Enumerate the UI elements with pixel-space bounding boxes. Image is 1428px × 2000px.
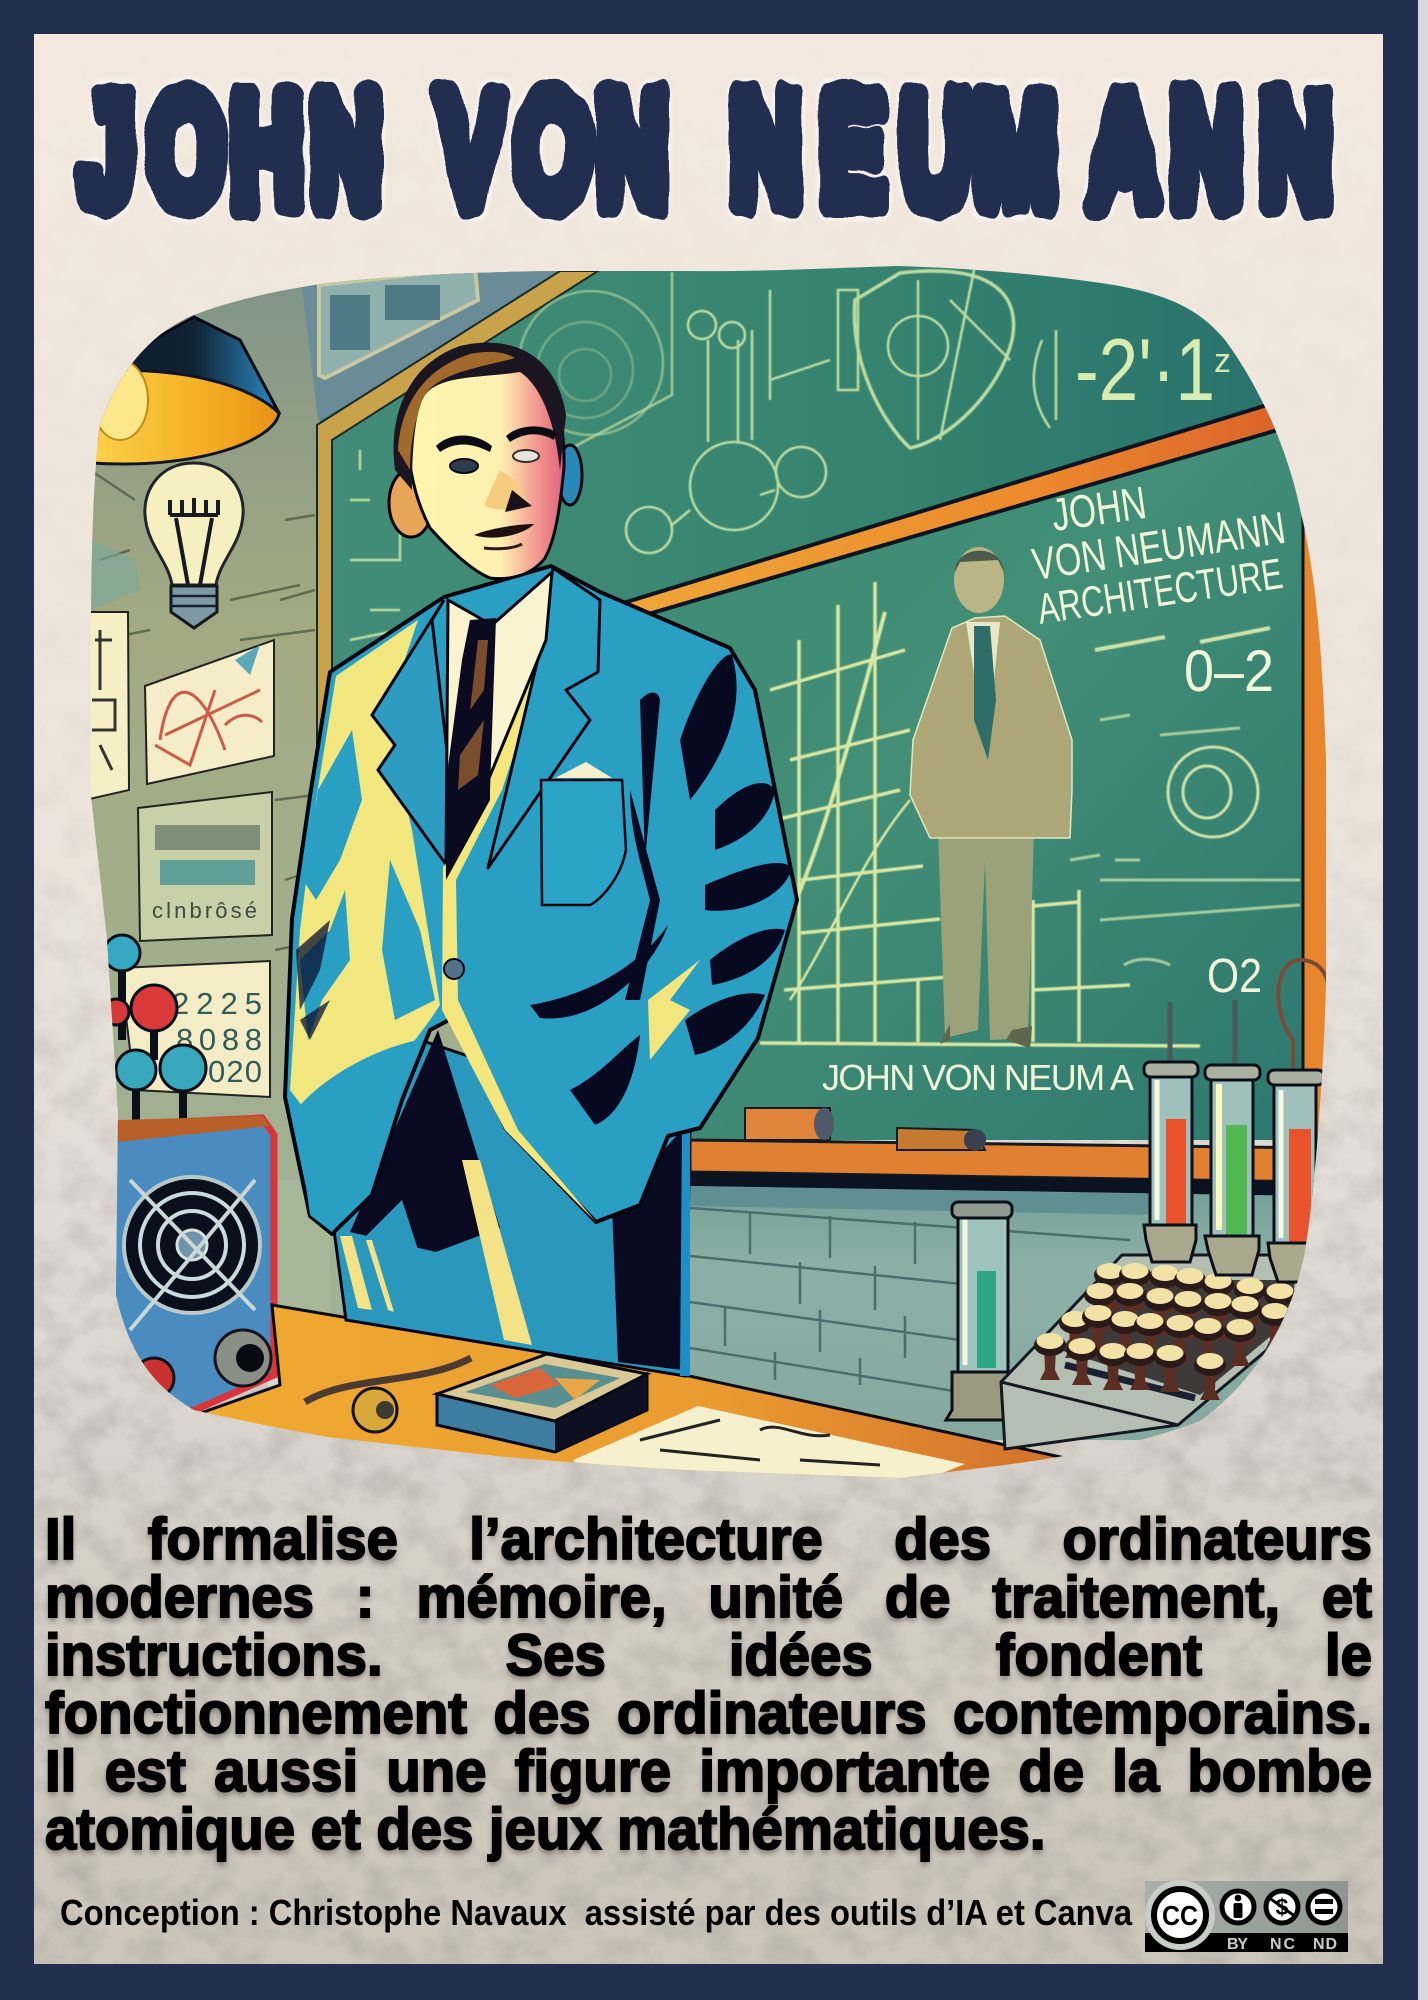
poster: numbers xyxy=(120,961,270,1097)
body text: modernes : mémoire, unité de traitement, et xyxy=(45,1565,1372,1630)
button xyxy=(444,959,464,979)
title: JOHN VON NEUMANN xyxy=(79,61,1331,240)
chalk writing lower board: VON NEUMANN xyxy=(1029,502,1289,590)
body text: Il est aussi une figure importante de la bombe xyxy=(45,1739,1372,1804)
brick wall xyxy=(680,1170,1340,1440)
body text: fonctionnement des ordinateurs contemporains. xyxy=(45,1681,1372,1746)
poster: numbers: 8088 xyxy=(176,1022,262,1057)
icon: creative commons badge: $ xyxy=(1276,1894,1289,1920)
desk xyxy=(100,1305,1120,1490)
body text xyxy=(43,1507,1374,1868)
yellow front edge xyxy=(442,570,596,1222)
tie xyxy=(445,618,496,880)
lower blackboard xyxy=(620,400,1310,1140)
figure on the board xyxy=(910,547,1072,1048)
icon: creative commons badge: BY xyxy=(1227,1936,1248,1953)
poster: left paper xyxy=(91,611,130,800)
right frame xyxy=(1303,522,1326,1140)
body text: Il formalise l’architecture des ordinateurs xyxy=(45,1507,1372,1572)
chalk rail xyxy=(620,398,1298,620)
lapel xyxy=(372,600,450,870)
icon: creative commons badge xyxy=(1145,1880,1348,1953)
small tube on bench xyxy=(946,1202,1018,1420)
wall xyxy=(80,260,700,1320)
poster: text sheet: clnbrôsé xyxy=(152,898,257,923)
tube: red xyxy=(1144,1002,1198,1262)
icon: creative commons badge: NC xyxy=(1270,1936,1295,1953)
light bulb xyxy=(145,463,243,628)
lamp xyxy=(90,317,279,464)
chalk sketches lower board xyxy=(1070,628,1300,965)
icon: creative commons badge: ND xyxy=(1313,1936,1337,1953)
chalk writing lower board: 0–2 xyxy=(1184,639,1274,704)
jacket xyxy=(285,566,797,1234)
chalk sketches upper board xyxy=(349,268,1058,642)
man xyxy=(285,343,797,1376)
pocket square and pocket xyxy=(541,762,626,905)
tube: green xyxy=(1205,1000,1260,1275)
poster: text sheet xyxy=(138,792,272,941)
poster: chart xyxy=(145,640,274,784)
trouser shadows xyxy=(350,1030,682,1370)
trouser stripes xyxy=(340,1160,532,1345)
trousers xyxy=(330,1040,690,1376)
desk knob and cable xyxy=(305,1358,471,1432)
upper board formula xyxy=(1078,338,1230,400)
icon: creative commons badge: CC xyxy=(1162,1900,1198,1931)
fan box xyxy=(110,1116,274,1420)
chalk writing lower board: JOHN VON NEUM A xyxy=(822,1057,1134,1098)
component tray on desk xyxy=(437,1354,647,1452)
blackboard frame xyxy=(317,271,598,760)
right arm highlights xyxy=(648,960,700,1060)
shirt xyxy=(446,572,552,860)
head xyxy=(389,343,582,579)
title: JOHN VON NEUMANN xyxy=(79,61,1331,240)
right lapel xyxy=(488,568,600,868)
chalk writing lower board: O2 xyxy=(1207,950,1262,1003)
tube: red right xyxy=(1268,960,1330,1282)
chalk tray xyxy=(690,1108,1320,1215)
upper board formula: -2'·1 xyxy=(1075,320,1215,419)
body text: instructions. Ses idées fondent le xyxy=(45,1623,1372,1688)
poster: numbers: 020 xyxy=(208,1054,262,1089)
illustration: von Neumann at the blackboard xyxy=(80,260,1340,1490)
jacket left yellow highlights xyxy=(290,620,440,1130)
keyboard device xyxy=(1001,1255,1305,1449)
footer credit: Conception : Christophe Navaux assisté par des outils d’IA et Canva xyxy=(60,1892,1133,1933)
right arm shadows xyxy=(530,654,792,1125)
chalk writing lower board: ARCHITECTURE xyxy=(1034,550,1286,634)
poster: top frame xyxy=(319,268,478,378)
molecule model xyxy=(103,935,206,1125)
paper on desk xyxy=(573,1406,965,1490)
left wall bricks xyxy=(270,1180,330,1320)
chalk writing lower board xyxy=(822,476,1289,1098)
body text: atomique et des jeux mathématiques. xyxy=(45,1797,1045,1862)
upper board formula: z xyxy=(1214,342,1231,380)
poster: numbers: 2225 xyxy=(172,986,262,1021)
chalk grid xyxy=(760,582,1200,1046)
upper blackboard xyxy=(320,266,1278,668)
chalk writing lower board: JOHN xyxy=(1048,476,1149,541)
